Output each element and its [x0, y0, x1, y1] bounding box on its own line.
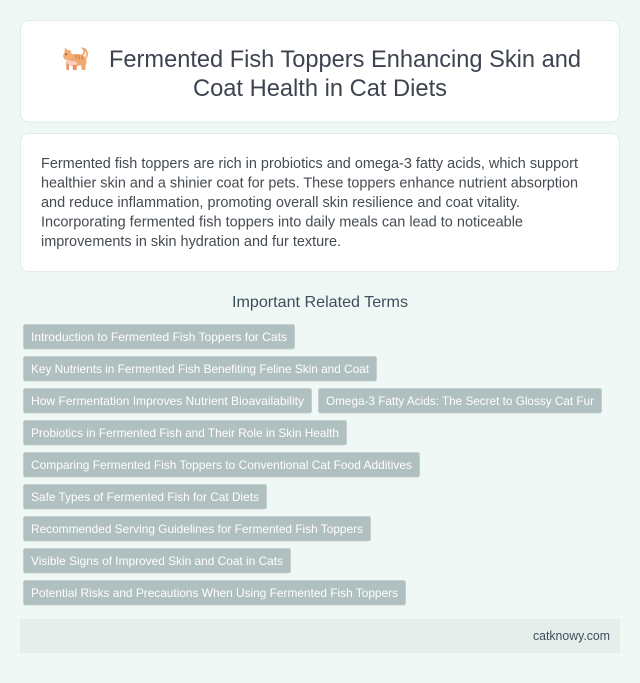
tag 3: How Fermentation Improves Nutrient Bioavailability [31, 394, 304, 408]
tag 8 [24, 516, 370, 541]
paragraph: improvements in skin hydration and fur texture. [41, 233, 341, 250]
tag 2: Key Nutrients in Fermented Fish Benefiting Feline Skin and Coat [31, 362, 370, 376]
paragraph: Incorporating fermented fish toppers into daily meals can lead to noticeable [41, 214, 523, 230]
paragraph: healthier skin and a shinier coat for pets. These toppers enhance nutrient absorption [41, 174, 578, 192]
paragraph: Fermented fish toppers are rich in probiotics and omega-3 fatty acids, which support [41, 155, 579, 172]
tag 7 [24, 484, 266, 509]
tag 9 [24, 548, 290, 573]
tag 4 [318, 388, 602, 413]
tag 2 [24, 356, 376, 381]
paragraph: and reduce inflammation, promoting overall skin resilience and coat vitality. [41, 194, 520, 211]
paragraph [41, 155, 579, 250]
footer [20, 619, 620, 653]
tag 10 [24, 580, 406, 605]
tag 10: Potential Risks and Precautions When Using Fermented Fish Toppers [31, 586, 398, 600]
tag 5 [24, 420, 346, 445]
title line 1: Fermented Fish Toppers Enhancing Skin and [109, 46, 581, 73]
title line 2: Coat Health in Cat Diets [193, 75, 447, 102]
tag 5: Probiotics in Fermented Fish and Their Role in Skin Health [31, 426, 339, 440]
heading: Important Related Terms: Important Related Terms [232, 294, 408, 311]
tag 1 [24, 324, 294, 349]
icon: cat [63, 48, 87, 70]
tag 1: Introduction to Fermented Fish Toppers for Cats [31, 330, 287, 344]
footer text: catknowy.com [533, 629, 610, 643]
tag 6: Comparing Fermented Fish Toppers to Conventional Cat Food Additives [31, 458, 412, 472]
tag 8: Recommended Serving Guidelines for Fermented Fish Toppers [31, 522, 363, 536]
tag 7: Safe Types of Fermented Fish for Cat Diets [31, 490, 259, 504]
related terms tags [24, 324, 602, 605]
tag 3 [24, 388, 312, 413]
panel: title card [20, 20, 620, 122]
tag 6 [24, 452, 420, 477]
panel: introduction text [20, 134, 620, 272]
tag 4: Omega-3 Fatty Acids: The Secret to Glossy Cat Fur [326, 394, 594, 408]
tag 9: Visible Signs of Improved Skin and Coat in Cats [31, 554, 283, 568]
